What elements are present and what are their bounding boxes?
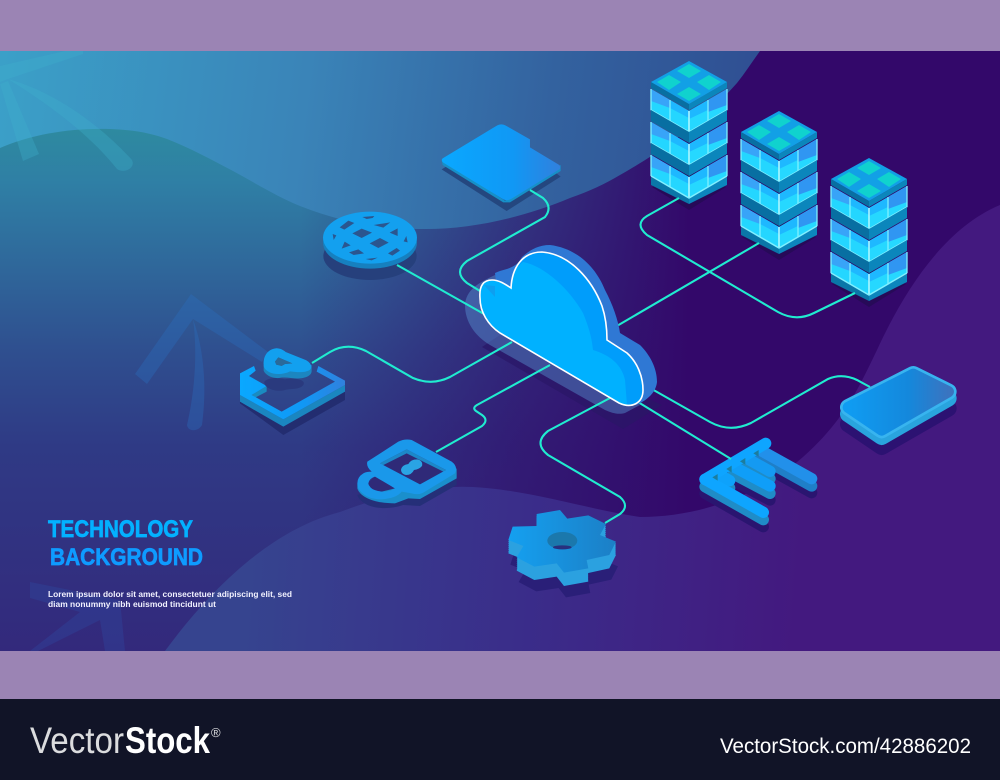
line: server two [610, 243, 759, 330]
icon: folder [442, 124, 561, 211]
icon: heart tray [240, 348, 345, 435]
comb shadows [705, 464, 812, 527]
body text: diam nonummy nibh euismod tincidunt ut [48, 599, 216, 609]
top purple band [0, 0, 1000, 51]
icon: server one [651, 61, 727, 210]
icon: gear [508, 510, 618, 597]
decorative arrow middle left [135, 294, 268, 430]
line: heart tray [312, 342, 512, 382]
connector lines [312, 190, 870, 523]
body text: Lorem ipsum dolor sit amet, consectetuer adipiscing elit, sed [48, 589, 292, 599]
line: gear [540, 398, 625, 523]
watermark footer [0, 699, 1000, 780]
icon: bar chart comb [705, 443, 812, 527]
line: server one [640, 198, 855, 317]
tooth four [747, 466, 770, 479]
body text [48, 589, 292, 609]
background blob: top wave [0, 51, 760, 229]
footer image id: VectorStock.com/42886202 [720, 735, 971, 758]
heart top [264, 348, 311, 374]
line: folder [460, 190, 549, 291]
panel: gradient background [0, 51, 1000, 651]
icon: phone [848, 374, 948, 447]
decorative arrow top left [0, 51, 133, 171]
tooth two [720, 482, 730, 488]
title [48, 516, 203, 571]
title: BACKGROUND [50, 544, 203, 571]
tooth three [733, 474, 770, 493]
tooth one [705, 487, 763, 520]
footer logo [30, 720, 221, 761]
spine [705, 443, 766, 479]
icon: cloud [480, 245, 657, 405]
bottom purple band [0, 651, 1000, 700]
line: phone [650, 376, 870, 428]
line: globe [397, 265, 484, 314]
decorative arrow bottom left [30, 582, 125, 651]
lock window [380, 449, 446, 484]
footer logo: Stock [125, 720, 210, 761]
line: bars [638, 402, 731, 459]
footer logo: Vector [30, 720, 124, 761]
heart shadow [264, 378, 304, 391]
icon: server two [741, 111, 817, 260]
keyhole [401, 459, 422, 475]
title: TECHNOLOGY [48, 516, 193, 543]
tooth five [760, 457, 812, 486]
tooth roots [712, 450, 759, 481]
footer logo: ® [211, 725, 221, 740]
icon: globe [323, 212, 417, 280]
cloud ground shadow [482, 335, 662, 429]
cloud translucent back lobe [465, 275, 640, 414]
line: lock [436, 365, 550, 452]
background blob: bottom wave [165, 205, 1000, 651]
icon: server three [831, 158, 907, 307]
heart side [264, 365, 312, 379]
icon: lock [357, 439, 457, 508]
